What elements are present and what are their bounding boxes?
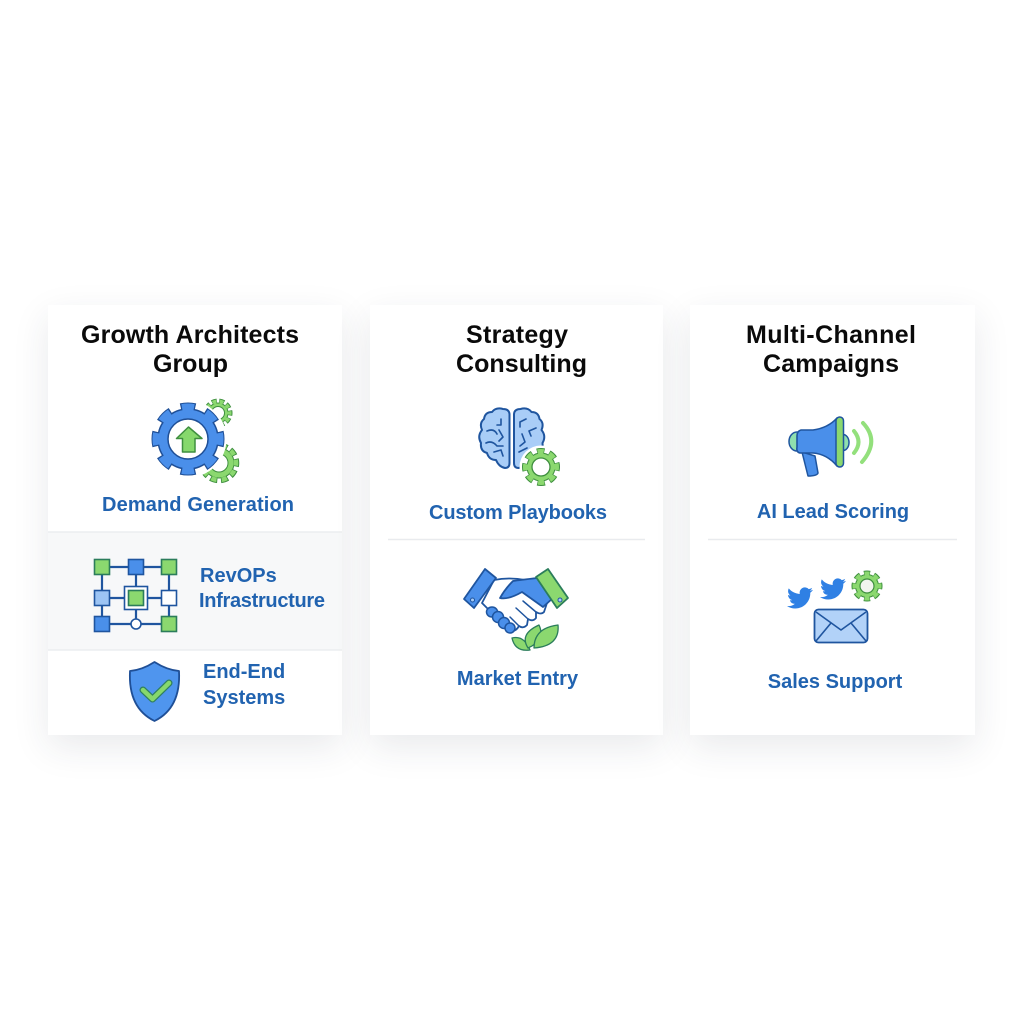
label: RevOPs Infrastructure: RevOPs [200,565,277,587]
heading: Multi-Channel Campaigns: Campaigns [763,350,899,378]
icon: gears with up arrow [150,400,236,480]
heading: Growth Architects Group: Growth Architects [81,321,299,349]
icon: social birds, gear and envelope [787,574,880,642]
label: RevOPs Infrastructure: Infrastructure [199,590,325,612]
label: Custom Playbooks: Custom Playbooks [429,502,607,524]
heading: Strategy Consulting: Strategy [466,321,568,349]
panel: Multi-Channel Campaigns [690,305,975,735]
icon: megaphone [789,417,871,476]
icon: brain with gear [479,408,562,488]
panel: Strategy Consulting [370,305,663,735]
divider [708,538,957,540]
heading: Growth Architects Group: Group [153,350,228,378]
label: End-End Systems: Systems [203,687,285,709]
heading: Multi-Channel Campaigns [746,321,916,378]
icon: handshake with leaves [464,569,568,650]
label: End-End Systems: End-End [203,661,285,683]
panel: Growth Architects Group [48,305,342,735]
heading: Strategy Consulting [456,321,587,378]
label: Demand Generation: Demand Generation [102,494,294,516]
heading: Multi-Channel Campaigns: Multi-Channel [746,321,916,349]
infrastructure band [48,532,342,650]
label: Market Entry: Market Entry [457,668,579,690]
label: Sales Support: Sales Support [768,671,903,693]
icon: network grid [94,560,176,632]
label: End-End Systems [203,661,285,709]
heading: Strategy Consulting: Consulting [456,350,587,378]
heading: Growth Architects Group [81,321,299,378]
divider [388,538,645,540]
icon: shield with check [130,662,179,721]
label: RevOPs Infrastructure [199,565,325,612]
label: AI Lead Scoring: AI Lead Scoring [757,501,909,523]
